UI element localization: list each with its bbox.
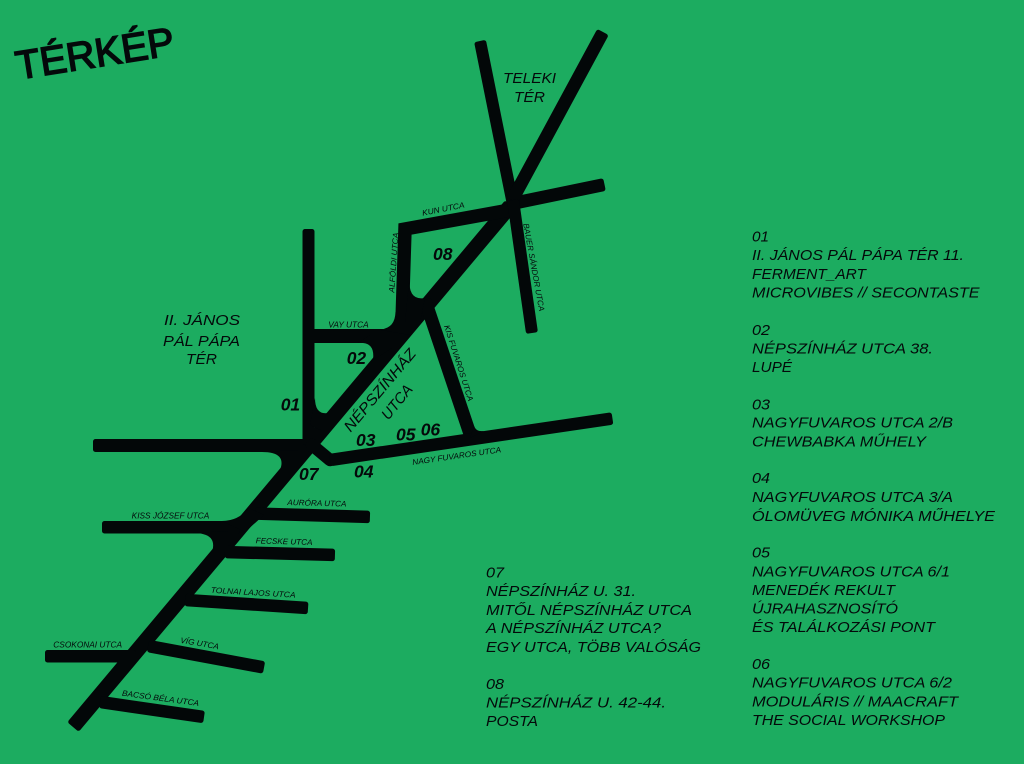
list entry 01: MICROVIBES // SECONTASTE — [752, 285, 981, 302]
street names: TOLNAI LAJOS UTCA — [211, 586, 296, 600]
list entry 07: MITŐL NÉPSZÍNHÁZ UTCA — [486, 602, 692, 619]
list entry 06 — [752, 656, 960, 729]
map location numbers — [281, 244, 453, 484]
place label: II. János Pál Pápa tér: PÁL PÁPA — [163, 333, 240, 350]
list entry 01: FERMENT_ART — [752, 266, 868, 283]
list entry 07: EGY UTCA, TÖBB VALÓSÁG — [486, 638, 701, 656]
street names: ALFÖLDI UTCA — [387, 232, 400, 294]
street names: KUN UTCA — [421, 201, 465, 218]
list entry 04: NAGYFUVAROS UTCA 3/A — [752, 489, 953, 506]
map location numbers: 08 — [433, 244, 453, 264]
list entry 05 — [752, 545, 950, 636]
list entry 01 — [752, 229, 981, 302]
list entry 07: 07 — [486, 565, 505, 582]
list entry 06: NAGYFUVAROS UTCA 6/2 — [752, 675, 953, 692]
list entry 03: 03 — [752, 396, 771, 414]
map location numbers: 02 — [347, 348, 366, 368]
place label: Népszínház utca: UTCA — [378, 381, 417, 423]
street names: NAGY FUVAROS UTCA — [412, 445, 502, 467]
street names: FECSKE UTCA — [256, 536, 313, 547]
place label: Teleki tér — [503, 70, 556, 106]
street network map — [45, 29, 613, 732]
map location numbers: 05 — [396, 425, 416, 445]
list entry 03: CHEWBABKA MŰHELY — [752, 433, 927, 450]
street names: BAUER SÁNDOR UTCA — [521, 223, 546, 312]
list entry 05: NAGYFUVAROS UTCA 6/1 — [752, 564, 950, 581]
street names: VAY UTCA — [328, 321, 369, 330]
list entry 07 — [485, 565, 701, 656]
map location numbers: 01 — [281, 395, 300, 415]
list entry 02: LUPÉ — [752, 359, 793, 376]
list entry 05: ÚJRAHASZNOSÍTÓ — [752, 601, 898, 618]
list entry 03 — [752, 396, 953, 450]
street names: VÍG UTCA — [180, 636, 220, 651]
place label: Teleki tér: TELEKI — [503, 70, 556, 87]
list entry 06: THE SOCIAL WORKSHOP — [752, 712, 945, 729]
map location numbers: 04 — [354, 461, 374, 481]
map location numbers: 06 — [421, 420, 440, 440]
list entry 08: 08 — [486, 676, 505, 693]
street names: CSOKONAI UTCA — [53, 640, 122, 649]
list entry 07: A NÉPSZÍNHÁZ UTCA? — [485, 620, 662, 637]
list entry 01: II. JÁNOS PÁL PÁPA TÉR 11. — [752, 247, 964, 264]
street names: AURÓRA UTCA — [286, 498, 346, 509]
street names: KIS FUVAROS UTCA — [442, 324, 475, 402]
list entry 01: 01 — [752, 229, 769, 246]
street names — [53, 201, 546, 708]
place label: II. János Pál Pápa tér: TÉR — [186, 351, 217, 368]
list entry 02: NÉPSZÍNHÁZ UTCA 38. — [752, 340, 933, 358]
list entry 04: 04 — [752, 470, 770, 487]
place label: II. János Pál Pápa tér — [163, 312, 240, 368]
list entry 06: 06 — [752, 656, 771, 673]
list entry 05: 05 — [752, 545, 771, 562]
list entry 03: NAGYFUVAROS UTCA 2/B — [752, 415, 953, 432]
street names: BACSÓ BÉLA UTCA — [121, 689, 200, 708]
list entry 08: NÉPSZÍNHÁZ U. 42-44. — [486, 695, 666, 712]
list entry 08: POSTA — [486, 713, 538, 730]
list entry 08 — [486, 676, 666, 730]
list entry 07: NÉPSZÍNHÁZ U. 31. — [486, 583, 636, 600]
map location numbers: 03 — [356, 430, 376, 450]
street names: KISS JÓZSEF UTCA — [132, 511, 209, 520]
list entry 04 — [752, 470, 996, 525]
title: TÉRKÉP — [12, 19, 177, 88]
list entry 04: ÓLOMÜVEG MÓNIKA MŰHELYE — [752, 507, 996, 525]
place label: Népszínház utca: NÉPSZÍNHÁZ — [341, 345, 420, 435]
list entry 02: 02 — [752, 322, 771, 339]
place label: Teleki tér: TÉR — [514, 89, 545, 106]
place label: II. János Pál Pápa tér: II. JÁNOS — [164, 312, 240, 329]
list entry 06: MODULÁRIS // MAACRAFT — [752, 694, 960, 711]
map location numbers: 07 — [299, 464, 320, 484]
list entry 02 — [752, 322, 933, 376]
list entry 05: ÉS TALÁLKOZÁSI PONT — [752, 619, 937, 636]
list entry 05: MENEDÉK REKULT — [752, 582, 897, 599]
